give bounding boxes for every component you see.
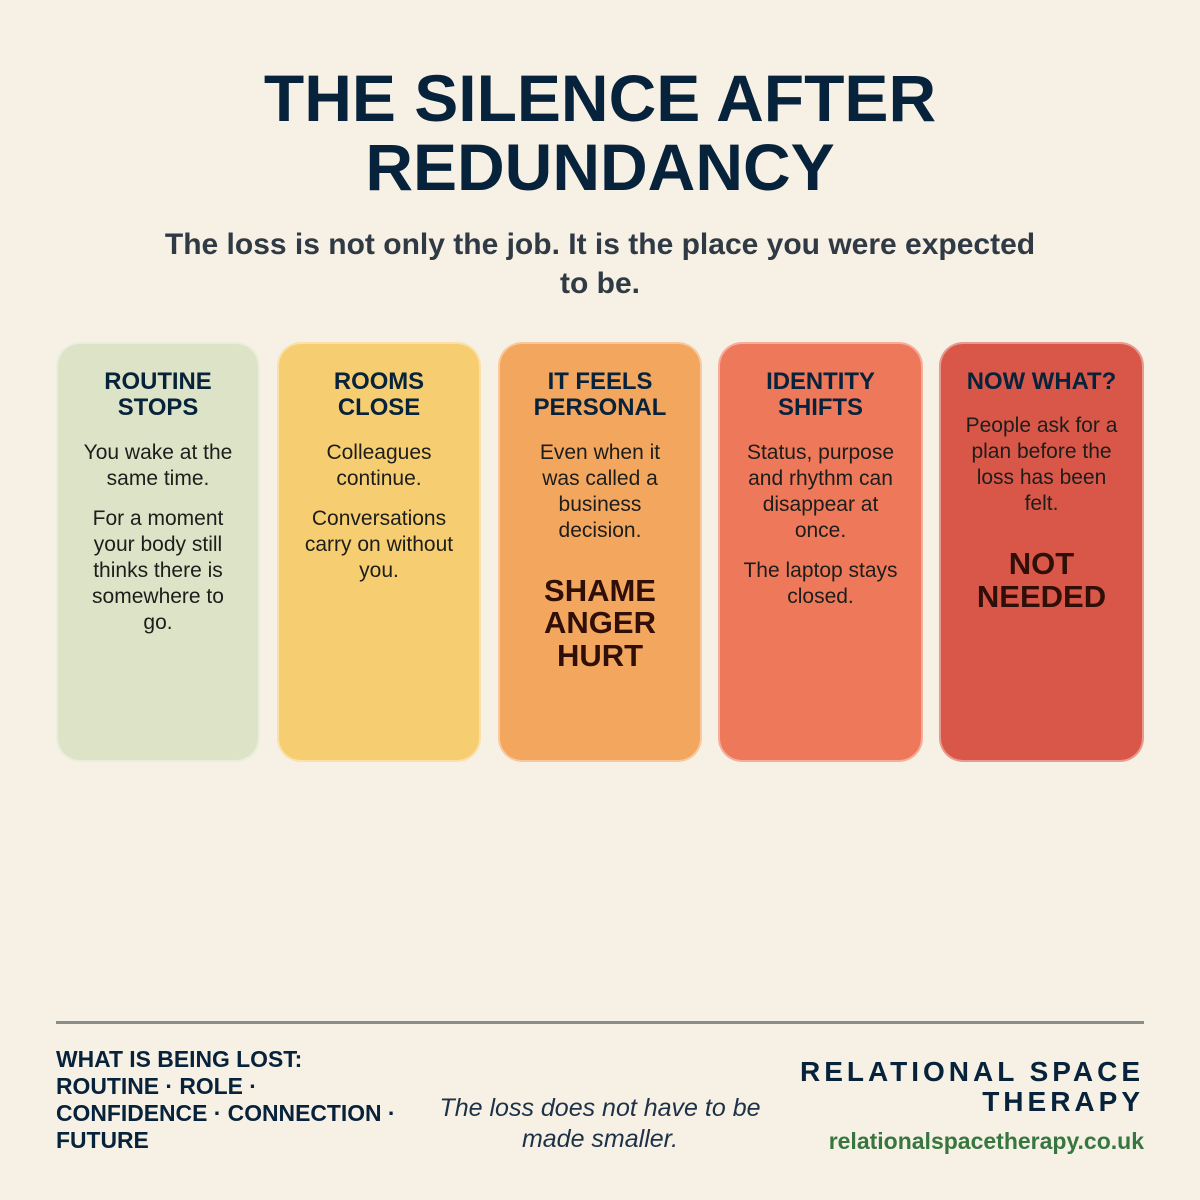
callout: shame anger hurt: ANGER: [544, 605, 656, 640]
heading: identity shifts: SHIFTS: [778, 394, 863, 421]
text: what is being lost: CONFIDENCE · CONNECTION ·: [56, 1100, 396, 1126]
panel: rooms close: [277, 342, 481, 762]
brand block: [800, 1056, 1144, 1154]
text: rooms close body: Colleagues continue.: [326, 441, 432, 490]
heading: now what: NOW WHAT?: [967, 368, 1116, 395]
text: routine stops body: You wake at the same time.: [84, 441, 232, 490]
heading: it feels personal: PERSONAL: [534, 394, 666, 421]
panel: identity shifts: [718, 342, 923, 762]
panel: now what: [939, 342, 1144, 762]
heading: routine stops: STOPS: [118, 394, 198, 421]
heading: rooms close: [334, 368, 424, 421]
text: closing statement: [439, 1094, 761, 1153]
panel: it feels personal: [498, 342, 702, 762]
heading: rooms close: CLOSE: [338, 394, 420, 421]
callout: shame anger hurt: SHAME: [544, 572, 656, 608]
text: what is being lost: [56, 1046, 396, 1153]
text: rooms close body: [305, 441, 453, 582]
footer divider: [56, 1021, 1144, 1024]
brand name: [800, 1056, 1144, 1117]
text: identity shifts body: The laptop stays closed.: [743, 559, 898, 608]
text: now what body: People ask for a plan before the loss has been felt.: [966, 414, 1117, 515]
callout: not needed: NOT: [1009, 546, 1074, 581]
panel: routine stops: [56, 342, 260, 762]
heading: routine stops: [104, 368, 212, 421]
callout: not needed: [977, 546, 1106, 614]
callout: not needed: NEEDED: [977, 578, 1106, 614]
text: what is being lost: FUTURE: [56, 1127, 149, 1153]
website: relationalspacetherapy.co.uk: [829, 1128, 1144, 1154]
text: it feels personal body: Even when it was called a business decision.: [540, 441, 660, 542]
text: what is being lost: WHAT IS BEING LOST:: [56, 1046, 302, 1072]
heading: it feels personal: [534, 368, 666, 421]
text: routine stops body: [84, 441, 232, 634]
heading: identity shifts: IDENTITY: [766, 368, 875, 395]
callout: shame anger hurt: [544, 572, 656, 672]
callout: shame anger hurt: HURT: [557, 638, 643, 672]
text: routine stops body: For a moment your body still thinks there is somewhere to go.: [92, 507, 224, 634]
title: THE SILENCE AFTER: [264, 61, 936, 135]
brand name: THERAPY: [982, 1086, 1144, 1117]
text: identity shifts body: [743, 441, 898, 608]
text: closing statement: The loss does not have to be: [439, 1094, 761, 1122]
title: REDUNDANCY: [365, 130, 835, 204]
subtitle: [165, 228, 1035, 300]
text: rooms close body: Conversations carry on without you.: [305, 507, 453, 582]
text: closing statement: made smaller.: [522, 1125, 678, 1153]
heading: rooms close: ROOMS: [334, 368, 424, 395]
subtitle: The loss is not only the job. It is the place you were expected: [165, 228, 1035, 261]
text: what is being lost: ROUTINE · ROLE ·: [56, 1073, 257, 1099]
heading: it feels personal: IT FEELS: [548, 368, 652, 395]
heading: routine stops: ROUTINE: [104, 368, 212, 395]
title: [264, 61, 936, 204]
heading: identity shifts: [766, 368, 875, 421]
subtitle: to be.: [560, 267, 640, 300]
brand name: RELATIONAL SPACE: [800, 1056, 1144, 1087]
text: identity shifts body: Status, purpose and rhythm can disappear at once.: [747, 441, 894, 542]
